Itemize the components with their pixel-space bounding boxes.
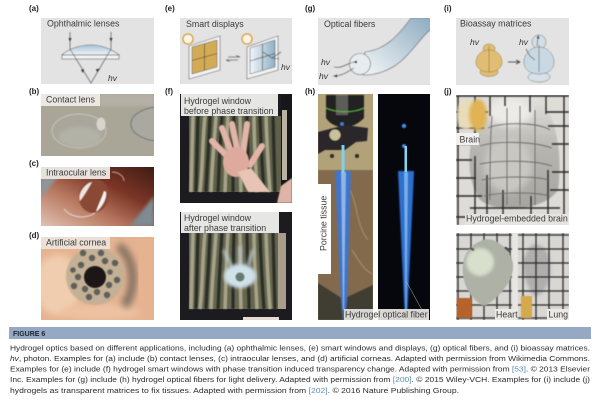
caption text: Examples for (e) include (f) hydrogel smart windows with phase transition induced transparency change. Adapted with permission from [53]. © 2013 Elsevier [10, 364, 591, 374]
panel f: hydrogel window after phase transition: after phase transition [184, 223, 266, 233]
panel a: ophthalmic lenses: Ophthalmic lenses [47, 18, 120, 28]
figure heading bar: FIGURE 6 [13, 331, 45, 338]
panel a: ophthalmic lenses: (a) [29, 4, 39, 13]
caption text [10, 344, 591, 395]
panel d: artificial cornea photo [29, 231, 154, 320]
panel d: artificial cornea photo: (d) [29, 231, 40, 240]
panel e: smart displays: (e) [165, 4, 175, 13]
panel g: optical fibers: hv [321, 57, 331, 67]
panel f: hydrogel window after phase transition [180, 212, 292, 320]
panel i: bioassay matrices: (i) [444, 4, 452, 13]
panel j: hydrogel-embedded brain photo: Brain [460, 134, 480, 144]
panel g: optical fibers [305, 4, 431, 85]
caption text: Inc. Examples for (g) include (h) hydrogel optical fibers for light delivery. Adapted with permission from [200]. © 2015 Wiley-VCH. Examples for (i) include (j) [10, 375, 591, 384]
caption text: hydrogels as transparent matrices to fix tissues. Adapted with permission from [202] . © 2016 Nature Publishing Group. [10, 386, 459, 395]
panel e: smart displays: hv [281, 62, 291, 72]
panel b: contact lens photo: (b) [29, 87, 40, 96]
panel f: hydrogel window before phase transition: before phase transition [184, 106, 274, 116]
panel f: hydrogel window before phase transition [165, 87, 292, 203]
panel j: heart and lung photo [456, 233, 569, 320]
panel g: optical fibers: Optical fibers [324, 19, 376, 29]
panel a: ophthalmic lenses [29, 4, 154, 84]
panel j: hydrogel-embedded brain photo [444, 87, 569, 225]
panel e: smart displays [165, 4, 292, 84]
panel h: porcine tissue photo with fiber: Hydrogel optical fiber [345, 310, 428, 320]
panel i: bioassay matrices [444, 4, 569, 85]
panel j: hydrogel-embedded brain photo: Hydrogel-embedded brain [466, 214, 568, 224]
panel e: smart displays: Smart displays [186, 19, 244, 29]
panel c: intraocular lens photo: Intraocular lens [46, 168, 107, 178]
panel a: ophthalmic lenses: hv [108, 73, 118, 83]
panel j: hydrogel-embedded brain photo: (j) [444, 87, 452, 96]
panel i: bioassay matrices: Bioassay matrices [460, 18, 532, 28]
figure heading bar [9, 327, 591, 339]
panel g: optical fibers: (g) [305, 4, 316, 13]
panel c: intraocular lens photo: (c) [29, 159, 39, 168]
panel f: hydrogel window after phase transition: Hydrogel window [184, 213, 252, 223]
panel d: artificial cornea photo: Artificial cornea [46, 238, 106, 248]
panel b: contact lens photo: Contact lens [46, 94, 95, 104]
caption text: Hydrogel optics based on different applications, including (a) ophthalmic lenses, (e) smart windows and displays, (g) optical fibers, and (i) bioassay matrices. [10, 344, 590, 352]
panel i: bioassay matrices: hv [519, 37, 529, 47]
panel f: hydrogel window before phase transition: (f) [165, 87, 173, 96]
caption text: hv, photon. Examples for (a) include (b) contact lenses, (c) intraocular lenses, and (d) artificial corneas. Adapted with permission from Wikimedia Commons. [10, 354, 590, 363]
panel h: porcine tissue photo with fiber [305, 87, 430, 320]
panel f: hydrogel window before phase transition: Hydrogel window [184, 96, 252, 106]
panel h: porcine tissue photo with fiber: Porcine tissue [318, 196, 328, 251]
panel j: heart and lung photo: Heart [496, 310, 518, 320]
panel i: bioassay matrices: hv [470, 37, 480, 47]
panel c: intraocular lens photo [29, 159, 154, 226]
panel j: heart and lung photo: Lung [548, 310, 568, 320]
panel g: optical fibers: hv [319, 71, 329, 81]
panel b: contact lens photo [29, 88, 154, 156]
panel h: porcine tissue photo with fiber: (h) [305, 87, 316, 96]
